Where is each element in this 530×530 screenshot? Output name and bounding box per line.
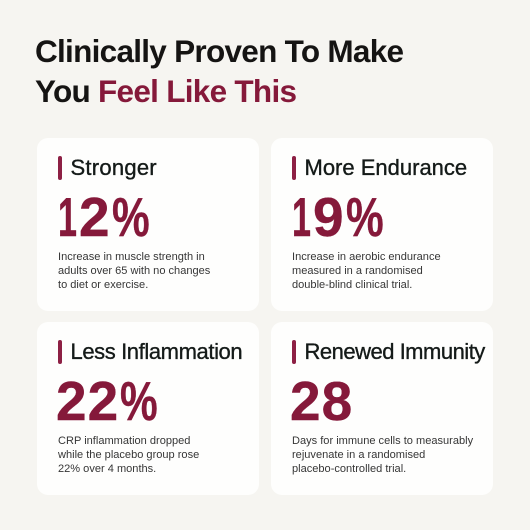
panel: less inflammation: 22 [56, 370, 119, 432]
panel: more endurance: 1 [292, 186, 311, 248]
panel: stronger: Increase in muscle strength in adults over 65 with no changes to diet or exercise. [58, 251, 210, 291]
panel: more endurance [271, 138, 493, 311]
panel: more endurance: 9 [313, 186, 345, 248]
panel: stronger: % [112, 186, 149, 248]
panel: renewed immunity [271, 322, 493, 495]
panel: renewed immunity: Renewed Immunity [304, 339, 485, 364]
panel: renewed immunity: 28 [290, 370, 353, 432]
panel: stronger: 1 [58, 186, 77, 248]
panel: less inflammation: % [120, 370, 158, 432]
title: You Feel Like This [35, 73, 296, 109]
panel: stronger: 2 [79, 186, 111, 248]
panel: less inflammation [37, 322, 259, 495]
title: Clinically Proven To Make [35, 33, 403, 69]
panel: more endurance: More Endurance [304, 155, 467, 180]
panel: stronger: Stronger [70, 155, 157, 180]
panel: less inflammation: CRP inflammation dropped while the placebo group rose 22% over 4 months. [58, 435, 199, 475]
panel: stronger [37, 138, 259, 311]
panel: more endurance: % [346, 186, 383, 248]
title [35, 33, 403, 109]
panel: more endurance: Increase in aerobic endurance measured in a randomised double-blind clinical trial. [292, 251, 441, 291]
panel: less inflammation: Less Inflammation [70, 339, 242, 364]
panel: renewed immunity: Days for immune cells to measurably rejuvenate in a randomised placebo-controlled trial. [292, 435, 473, 475]
